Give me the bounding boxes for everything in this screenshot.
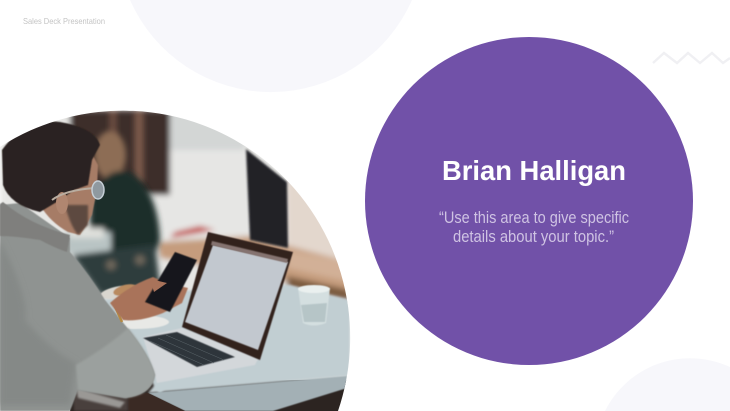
ear bbox=[56, 192, 68, 214]
window frame bbox=[246, 149, 288, 248]
laptop screen bbox=[185, 245, 288, 350]
glasses bbox=[52, 188, 95, 200]
hair bbox=[2, 122, 100, 212]
sweater bbox=[0, 203, 155, 411]
background person bbox=[65, 131, 160, 295]
keyboard bbox=[143, 332, 235, 367]
hand bbox=[110, 277, 188, 320]
man bbox=[0, 122, 197, 411]
photo background bbox=[0, 110, 348, 302]
header label: Sales Deck Presentation bbox=[23, 16, 105, 26]
photo: man working at laptop bbox=[0, 110, 350, 411]
laptop base bbox=[143, 328, 258, 383]
plate and food bbox=[99, 282, 169, 329]
table bbox=[148, 285, 350, 393]
quote text bbox=[439, 209, 629, 246]
icon: zigzag line bbox=[653, 53, 730, 63]
quote text: “Use this area to give specific bbox=[439, 209, 629, 227]
glass of water bbox=[298, 285, 330, 326]
bracelet bbox=[114, 307, 124, 322]
laptop bbox=[143, 232, 293, 383]
neck and face bbox=[42, 156, 98, 236]
quote text: details about your topic.” bbox=[453, 228, 614, 246]
phone bbox=[145, 252, 197, 312]
decorative circle: top bbox=[130, 0, 412, 92]
dark floor below table bbox=[70, 380, 350, 411]
laptop lid bbox=[182, 232, 293, 360]
sweater collar bbox=[0, 202, 70, 252]
decorative circle: bottom right bbox=[605, 358, 730, 411]
name heading: Brian Halligan bbox=[442, 155, 626, 186]
panel: purple circle bbox=[365, 37, 693, 365]
